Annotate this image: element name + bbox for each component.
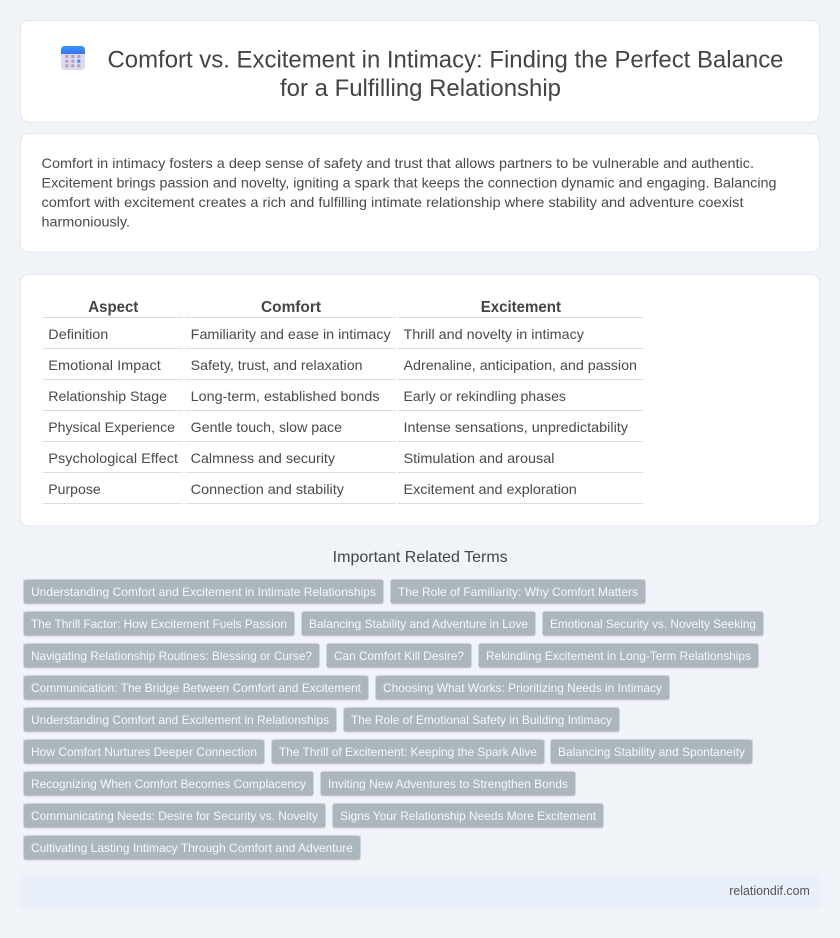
row: physical experience: Gentle touch, slow pace	[191, 419, 342, 435]
panel: summary text	[20, 134, 820, 252]
summary paragraph: Excitement brings passion and novelty, igniting a spark that keeps the connection dynamic and engaging. Balancing	[42, 174, 776, 190]
row: definition: Thrill and novelty in intimacy	[404, 326, 584, 342]
row: definition: Familiarity and ease in intimacy	[191, 326, 391, 342]
row: relationship stage: Relationship Stage	[48, 388, 167, 404]
title	[108, 46, 784, 102]
footer site name: relationdif.com	[729, 883, 810, 898]
panel: related term tags: Understanding Comfort and Excitement in Intimate Relationships	[31, 585, 376, 599]
panel: related term tags: Inviting New Adventures to Strengthen Bonds	[328, 777, 568, 791]
summary paragraph	[42, 155, 776, 230]
icon: calendar	[61, 46, 85, 70]
row: psychological effect	[48, 450, 555, 466]
row: psychological effect: Psychological Effect	[48, 450, 178, 466]
row: emotional impact: Safety, trust, and relaxation	[191, 357, 362, 373]
panel: related term tags: Rekindling Excitement in Long-Term Relationships	[486, 649, 751, 663]
row: emotional impact: Adrenaline, anticipation, and passion	[404, 357, 637, 373]
panel: related term tags: Communicating Needs: Desire for Security vs. Novelty	[31, 809, 318, 823]
row: physical experience: Physical Experience	[48, 419, 175, 435]
row: purpose: Excitement and exploration	[404, 481, 577, 497]
row: purpose: Connection and stability	[191, 481, 344, 497]
row: emotional impact: Emotional Impact	[48, 357, 161, 373]
row: definition: Definition	[48, 326, 108, 342]
table header row	[88, 299, 562, 316]
panel: related term tags: Emotional Security vs. Novelty Seeking	[550, 617, 756, 631]
panel: related term tags: How Comfort Nurtures Deeper Connection	[31, 745, 257, 759]
panel: related term tags: Recognizing When Comfort Becomes Complacency	[31, 777, 306, 791]
table header row: Excitement	[481, 299, 562, 316]
row: psychological effect: Stimulation and arousal	[404, 450, 554, 466]
row: purpose	[48, 481, 577, 497]
panel: header	[20, 20, 820, 122]
panel: related term tags: Navigating Relationship Routines: Blessing or Curse?	[31, 649, 312, 663]
panel: related term tags: The Thrill of Excitement: Keeping the Spark Alive	[279, 745, 537, 759]
panel: related term tags	[24, 580, 764, 860]
summary paragraph: Comfort in intimacy fosters a deep sense of safety and trust that allows partners to be vulnerable and authentic.	[42, 155, 754, 171]
panel: related term tags: The Thrill Factor: How Excitement Fuels Passion	[31, 617, 287, 631]
footer	[20, 874, 820, 908]
panel: related term tags: Can Comfort Kill Desire?	[334, 649, 464, 663]
summary paragraph: comfort with excitement creates a rich and fulfilling intimate relationship where stability and adventure coexist	[42, 194, 744, 210]
row: relationship stage: Early or rekindling phases	[404, 388, 566, 404]
row: psychological effect: Calmness and security	[191, 450, 335, 466]
row: emotional impact	[48, 357, 637, 373]
panel: related term tags: Choosing What Works: Prioritizing Needs in Intimacy	[383, 681, 662, 695]
panel: related term tags: Balancing Stability and Adventure in Love	[309, 617, 528, 631]
table header row: Aspect	[88, 299, 139, 316]
title: Comfort vs. Excitement in Intimacy: Finding the Perfect Balance	[108, 46, 784, 74]
row: physical experience: Intense sensations, unpredictability	[404, 419, 628, 435]
panel: related term tags: Understanding Comfort and Excitement in Relationships	[31, 713, 329, 727]
title: for a Fulfilling Relationship	[280, 75, 561, 102]
panel: related term tags: The Role of Emotional Safety in Building Intimacy	[351, 713, 612, 727]
table header row: Comfort	[261, 299, 322, 316]
summary paragraph: harmoniously.	[42, 214, 130, 230]
panel: related term tags: Cultivating Lasting Intimacy Through Comfort and Adventure	[31, 841, 353, 855]
row: definition	[48, 326, 584, 342]
row: purpose: Purpose	[48, 481, 101, 497]
panel: related term tags: Signs Your Relationship Needs More Excitement	[340, 809, 597, 823]
panel: related term tags: The Role of Familiarity: Why Comfort Matters	[398, 585, 638, 599]
panel: related term tags: Balancing Stability and Spontaneity	[558, 745, 745, 759]
panel: comparison table	[20, 274, 820, 526]
row: physical experience	[48, 419, 628, 435]
panel: related term tags: Communication: The Bridge Between Comfort and Excitement	[31, 681, 362, 695]
row: relationship stage: Long-term, established bonds	[191, 388, 380, 404]
heading: important related terms: Important Related Terms	[333, 549, 508, 566]
row: relationship stage	[48, 388, 566, 404]
